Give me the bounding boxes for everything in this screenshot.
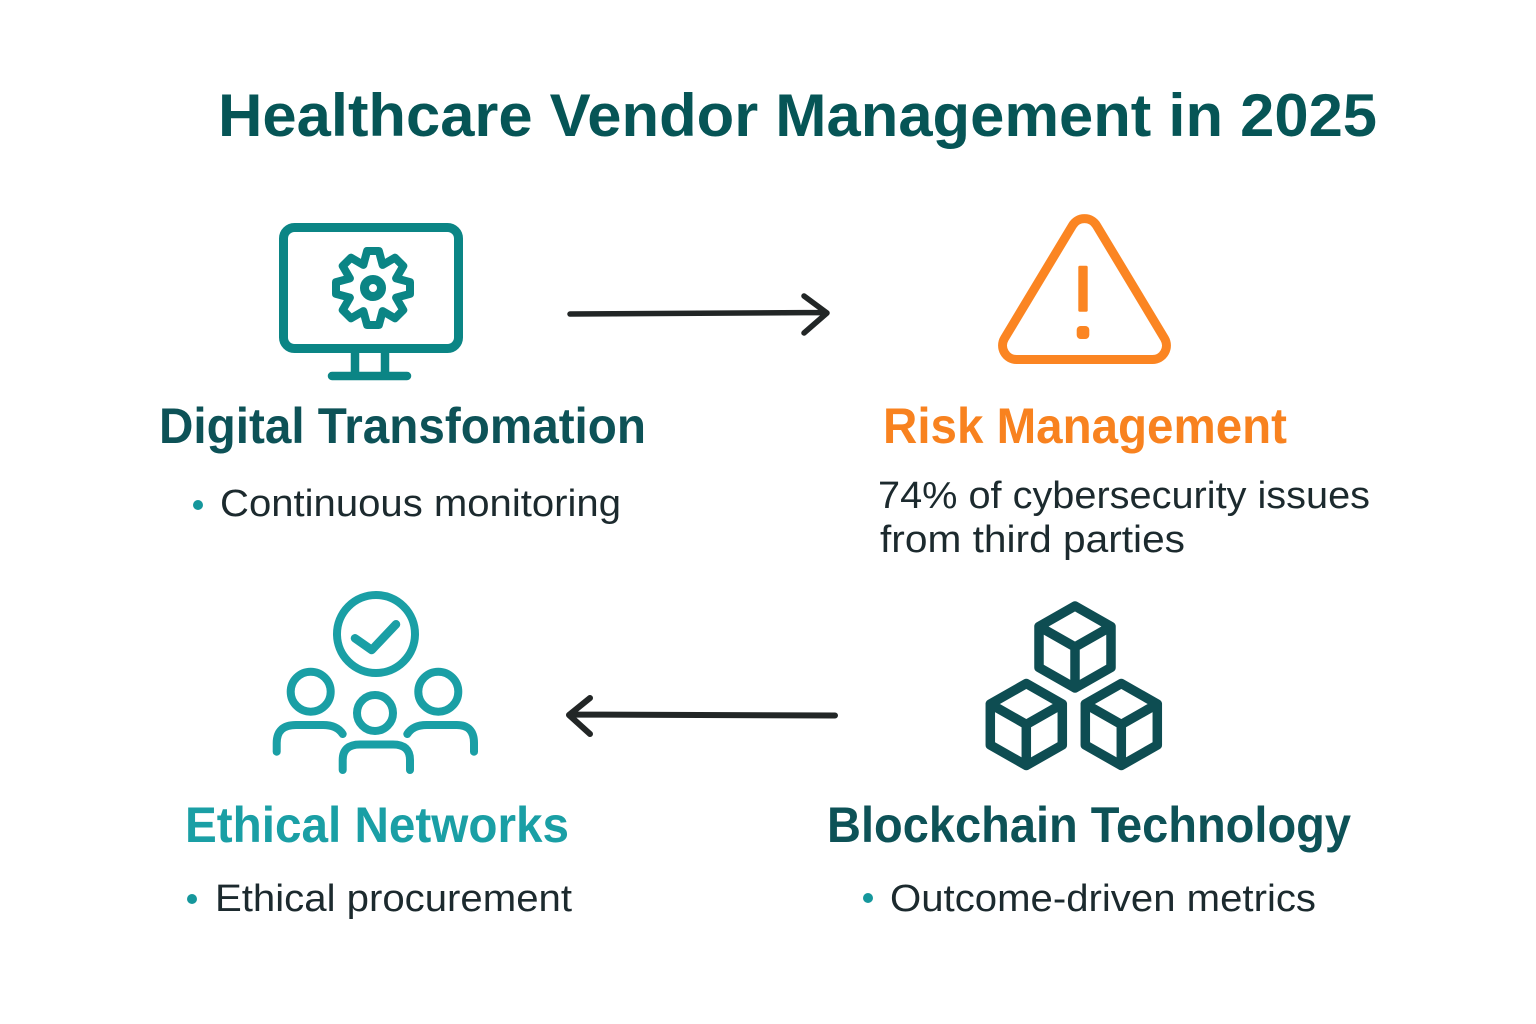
panel: digital transformation: [159, 228, 646, 525]
heading: ethical networks: Ethical Networks: [185, 797, 569, 853]
bullet: continuous monitoring: Continuous monitoring: [220, 483, 621, 525]
arrow: digital transformation to risk management: [570, 296, 827, 333]
heading: blockchain technology: Blockchain Technology: [827, 797, 1351, 853]
icon: three cubes: [990, 606, 1157, 766]
arrow: blockchain technology to ethical networks: [569, 698, 835, 734]
heading: digital transformation: Digital Transfomation: [159, 398, 646, 454]
icon: warning triangle: [1003, 219, 1166, 360]
text: third party statistic: 74% of cybersecurity issues: [878, 475, 1370, 517]
bullet: outcome-driven metrics: Outcome-driven metrics: [890, 878, 1316, 920]
panel: ethical networks: [185, 595, 572, 920]
heading: risk management: Risk Management: [883, 398, 1287, 454]
icon: people with check mark: [277, 595, 474, 770]
text: third party statistic: from third parties: [880, 519, 1185, 561]
panel: blockchain technology: [827, 606, 1351, 920]
panel: risk management: [878, 219, 1370, 561]
text: third party statistic: [878, 475, 1370, 561]
bullet: ethical procurement: Ethical procurement: [215, 878, 572, 920]
icon: monitor with gear: [284, 228, 458, 376]
title: Healthcare Vendor Management in 2025: [218, 82, 1377, 149]
